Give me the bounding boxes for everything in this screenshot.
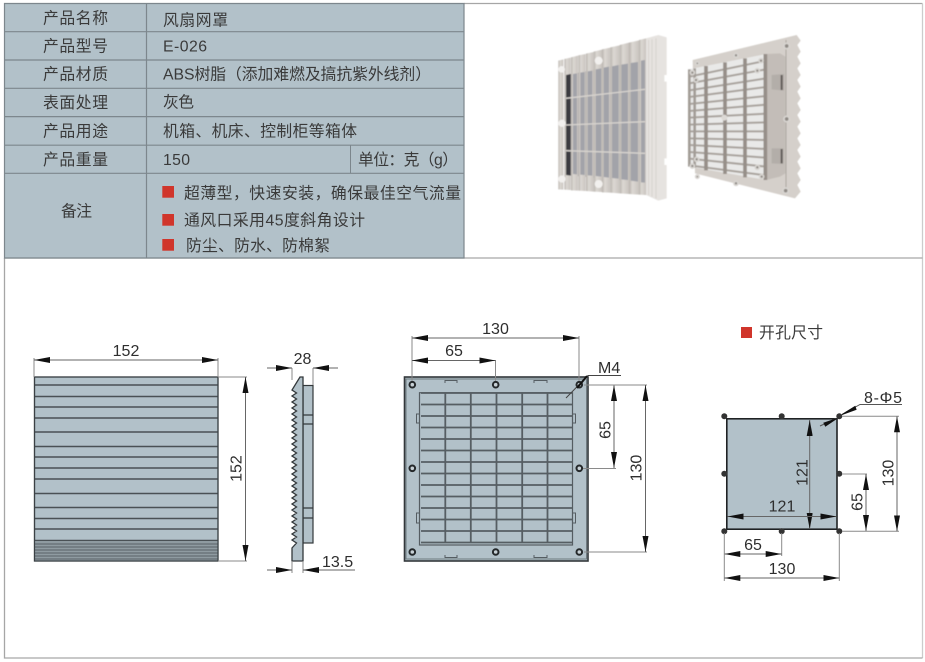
dimension: 130 right [584,385,647,552]
drawing: front view [34,343,247,561]
dimension: 130 right: 130 [628,455,646,481]
dimension: 130 bottom: 130 [769,561,795,578]
dimension: 65 right [583,385,616,468]
row: product weight: 产品重量 [43,151,108,169]
dimension: 130 right [842,416,899,531]
dimension: width 152 [34,343,218,377]
drawing: back view [404,321,647,561]
mounting holes [410,382,582,555]
heading: cut-out size: 开孔尺寸 [759,324,823,342]
row: product weight [43,151,458,169]
row: product weight: 150 [163,152,190,169]
row: product name [43,10,228,30]
row: surface treatment: 灰色 [163,94,194,112]
dimension: 121 horizontal [728,498,836,516]
dimension: depth 28: 28 [294,351,312,368]
callout: 8-Φ5 [820,390,902,426]
row: product model: E-026 [163,38,207,56]
dimension: 130 right: 130 [880,460,898,486]
holes [721,413,842,534]
dimension: height 152 [218,377,247,561]
dimension: 13.5 [267,554,355,573]
dimension: 65 right [842,474,867,531]
row: product material: 产品材质 [43,66,108,84]
remark: ultra thin: 超薄型，快速安装，确保最佳空气流量 [184,184,461,202]
row: product model [43,38,207,56]
row: product name: 产品名称 [43,10,108,28]
callout: M4 [566,360,621,398]
row: product model: 产品型号 [43,38,108,56]
dimension: width 152: 152 [113,343,139,360]
row: product name: 风扇网罩 [163,12,228,30]
dimension: 130 top [412,321,579,381]
dimension: 65 bottom [724,533,782,556]
dimension: 65 top [412,343,496,381]
dimension: 65 bottom: 65 [744,537,762,554]
dimension: 13.5: 13.5 [322,554,353,571]
dimension: 65 right: 65 [850,493,866,511]
remark: protection: 防尘、防水、防棉絮 [186,237,330,255]
photo: fan guard back [688,35,801,198]
dimension: depth 28 [267,351,338,385]
row: product use: 机箱、机床、控制柜等箱体 [163,122,357,140]
callout: M4: M4 [598,360,620,377]
row: product use [43,122,357,140]
dimension: 121 horizontal: 121 [769,498,795,516]
callout: 8-Φ5: 8-Φ5 [864,390,902,407]
drawing: side view [267,351,355,573]
photo: fan guard front [558,35,667,201]
dimension: height 152: 152 [228,455,246,482]
row: surface treatment [43,94,194,112]
dimension: 121 vertical [794,420,812,529]
row: product weight: 单位：克（g） [358,151,458,169]
row: product use: 产品用途 [43,122,108,140]
dimension: 130 bottom [724,533,839,581]
dimension: 130 top: 130 [482,321,509,338]
dimension: 121 vertical: 121 [794,459,812,486]
panel: product specification table [4,4,464,258]
dimension: 65 right: 65 [598,421,614,439]
row: product material [43,66,431,84]
row: remarks label: 备注 [61,202,92,220]
row: product material: ABS树脂（添加难燃及搞抗紫外线剂） [163,66,431,84]
remark: 45 degree vents: 通风口采用45度斜角设计 [184,212,365,230]
dimension: 65 top: 65 [445,343,463,360]
drawing: cut-out [721,390,902,581]
row: surface treatment: 表面处理 [43,94,108,112]
